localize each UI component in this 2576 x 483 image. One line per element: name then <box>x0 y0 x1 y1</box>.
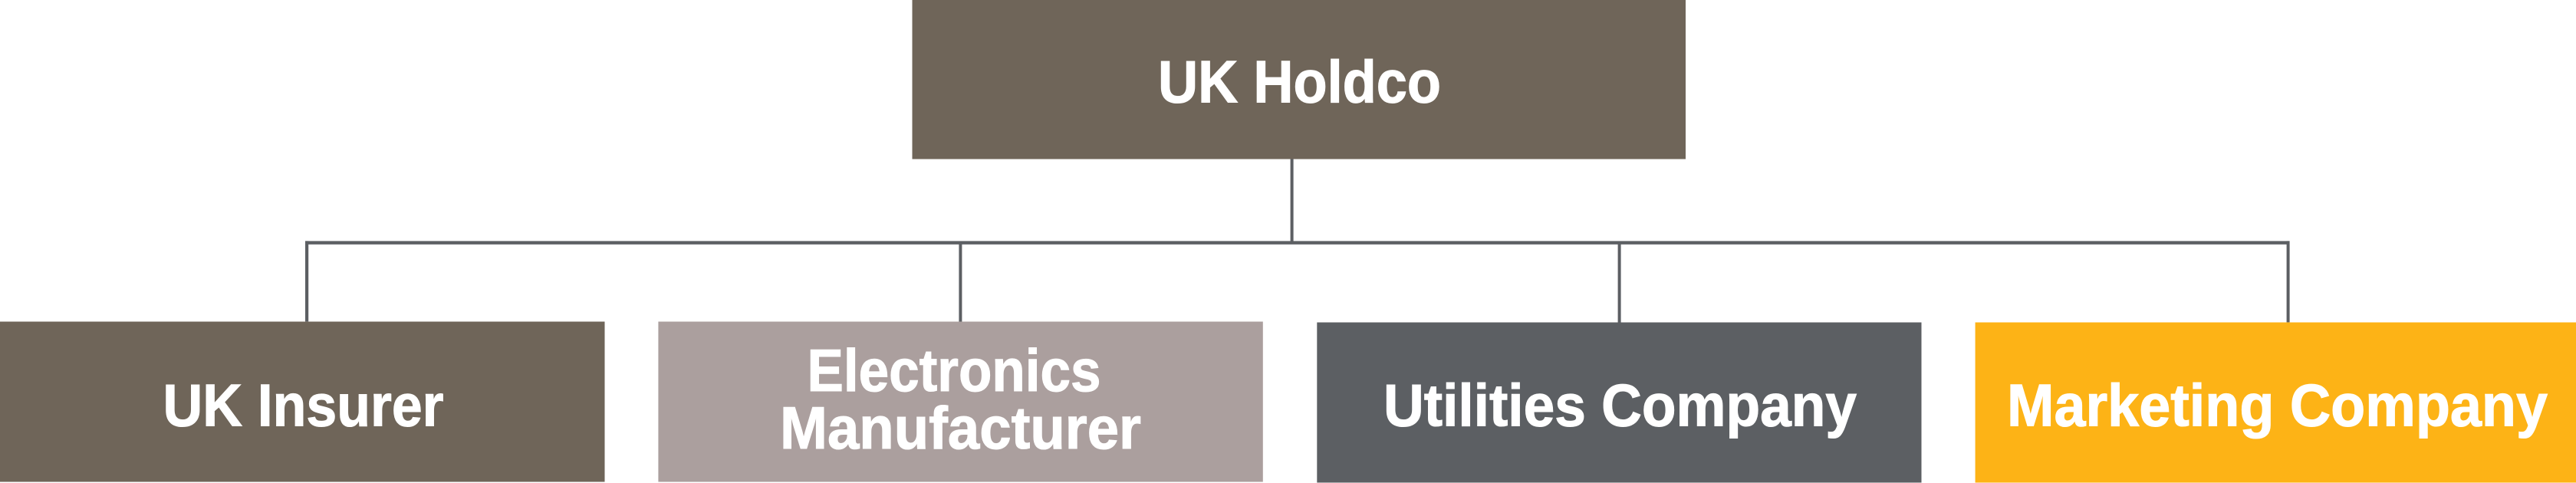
box: Electronics Manufacturer: Electronics <box>807 337 1101 404</box>
box: UK Holdco: UK Holdco <box>1158 48 1441 116</box>
box: Marketing Company: Marketing Company <box>2007 372 2548 439</box>
box: UK Holdco <box>913 0 1686 159</box>
box: Electronics Manufacturer: Manufacturer <box>780 394 1141 462</box>
box: Utilities Company <box>1317 322 1922 483</box>
box: Marketing Company <box>1976 322 2576 483</box>
box: Electronics Manufacturer <box>658 322 1263 481</box>
box: Utilities Company: Utilities Company <box>1383 372 1857 439</box>
box: UK Insurer <box>0 322 604 481</box>
box: UK Insurer: UK Insurer <box>163 372 443 439</box>
connector lines <box>305 159 2290 323</box>
